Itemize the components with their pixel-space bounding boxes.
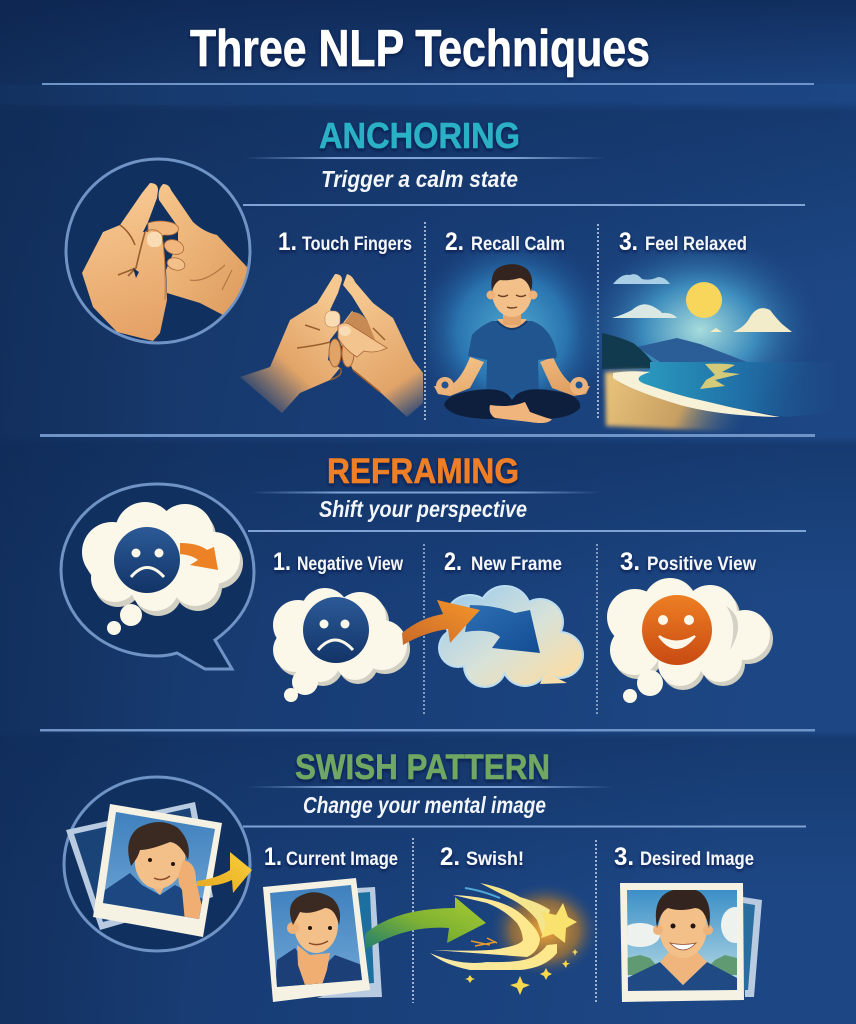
- icon: positive thought cloud: [607, 578, 773, 703]
- step label: touch fingers: 1.: [278, 228, 297, 256]
- step label: swish: Swish!: [466, 849, 524, 870]
- subtitle: reframing: Shift your perspective: [319, 496, 527, 522]
- step label: desired image: 3.: [614, 843, 634, 871]
- step label: current image: [264, 843, 398, 871]
- step label: recall calm: Recall Calm: [471, 234, 565, 255]
- panel: reframing: [61, 452, 806, 714]
- step label: positive view: [620, 548, 756, 576]
- illustration: meditating person: [427, 246, 594, 423]
- step label: touch fingers: Touch Fingers: [302, 234, 412, 255]
- step label: desired image: Desired Image: [640, 849, 754, 870]
- step label: positive view: 3.: [620, 548, 640, 576]
- step label: negative view: 1.: [273, 548, 291, 576]
- step label: feel relaxed: [619, 228, 747, 256]
- step label: swish: [440, 843, 524, 871]
- step label: new frame: [444, 548, 562, 576]
- icon: desired image photo: [620, 883, 762, 1002]
- panel: anchoring: [66, 115, 835, 432]
- arrow: green arrow: [365, 897, 486, 950]
- icon: hands in circle: [66, 159, 250, 343]
- subtitle: anchoring: Trigger a calm state: [321, 166, 518, 192]
- icon: touching hands: [240, 274, 423, 417]
- illustration: beach scene: [575, 230, 835, 432]
- step label: new frame: 2.: [444, 548, 462, 576]
- step label: recall calm: [445, 228, 565, 256]
- step label: positive view: Positive View: [647, 554, 756, 575]
- heading: anchoring: ANCHORING: [319, 115, 520, 156]
- title: Three NLP Techniques: [190, 20, 650, 78]
- step label: feel relaxed: 3.: [619, 228, 638, 256]
- step label: feel relaxed: Feel Relaxed: [645, 234, 747, 255]
- step label: negative view: [273, 548, 403, 576]
- panel: swish pattern: [64, 748, 806, 1003]
- icon: new frame cloud: [438, 585, 584, 688]
- arrow: orange reframing arrow: [402, 600, 480, 645]
- subtitle: swish pattern: Change your mental image: [303, 792, 546, 818]
- arrow: yellow arrow: [197, 852, 252, 893]
- step label: new frame: New Frame: [471, 554, 562, 575]
- step label: desired image: [614, 843, 754, 871]
- step label: current image: 1.: [264, 843, 282, 871]
- step label: swish: 2.: [440, 843, 460, 871]
- icon: current image photo: [263, 878, 382, 1002]
- icon: photos in circle: [64, 777, 250, 951]
- step label: negative view: Negative View: [297, 554, 403, 575]
- step label: recall calm: 2.: [445, 228, 464, 256]
- step label: touch fingers: [278, 228, 412, 256]
- step label: current image: Current Image: [286, 849, 398, 870]
- heading: reframing: REFRAMING: [327, 452, 519, 491]
- icon: negative thought cloud: [273, 588, 410, 702]
- heading: swish pattern: SWISH PATTERN: [295, 748, 550, 787]
- icon: swish streaks and star: [430, 882, 601, 995]
- icon: thought bubble with sad face: [61, 484, 254, 669]
